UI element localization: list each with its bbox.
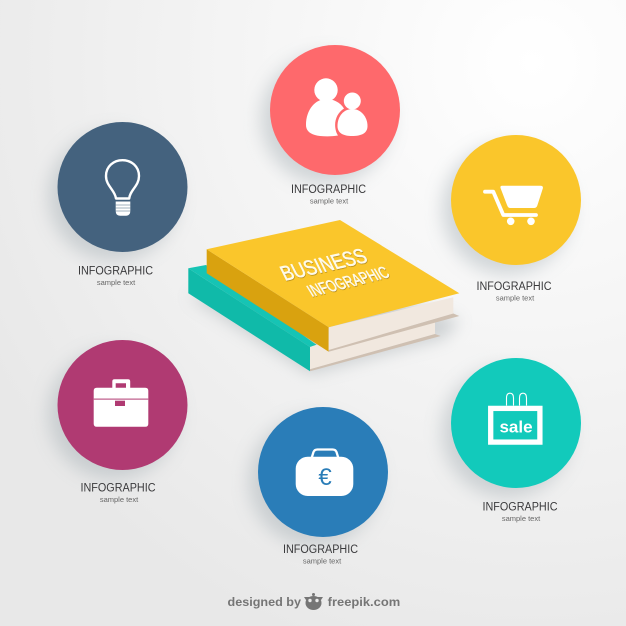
book title: BUSINESS (277, 245, 371, 285)
label: briefcase: sample text (100, 495, 139, 504)
label: cart: INFOGRAPHIC (476, 281, 552, 293)
label: cart (476, 281, 552, 302)
label: light bulb: sample text (97, 278, 136, 287)
illustration: stacked books (188, 220, 460, 374)
footer credit (228, 593, 400, 610)
label: light bulb (78, 266, 153, 287)
panel: sale circle (442, 358, 581, 523)
label: light bulb: INFOGRAPHIC (78, 266, 153, 278)
icon: euro bag: € (318, 464, 332, 491)
label: people: sample text (310, 196, 349, 206)
label: cart: sample text (496, 294, 535, 302)
label: briefcase (80, 483, 156, 504)
label: people: INFOGRAPHIC (291, 184, 366, 196)
icon: freepik mascot (304, 593, 323, 610)
label: sale (482, 502, 558, 523)
panel: light bulb circle (48, 122, 188, 287)
icon: euro bag (296, 450, 353, 496)
label: sale: sample text (502, 514, 541, 523)
label: people (291, 184, 366, 206)
footer credit: freepik.com (328, 595, 400, 609)
book title (277, 245, 393, 300)
panel: people circle (261, 45, 400, 206)
icon: shopping cart (485, 186, 543, 225)
icon: briefcase (94, 379, 148, 427)
lower book (188, 265, 441, 371)
panel: cart circle (442, 135, 581, 302)
book title: INFOGRAPHIC (304, 264, 393, 300)
label: euro bag: sample text (303, 556, 342, 566)
label: sale: INFOGRAPHIC (482, 502, 558, 514)
icon: sale bag (491, 393, 540, 442)
label: euro bag (283, 544, 358, 566)
icon: light bulb (106, 160, 139, 216)
icon: sale bag: sale (499, 418, 533, 436)
footer credit: designed by (228, 595, 301, 609)
label: briefcase: INFOGRAPHIC (80, 483, 156, 495)
panel: briefcase circle (48, 340, 188, 504)
label: euro bag: INFOGRAPHIC (283, 544, 358, 556)
panel: euro bag circle (249, 407, 388, 566)
upper book (207, 220, 459, 352)
icon: people (306, 78, 368, 136)
